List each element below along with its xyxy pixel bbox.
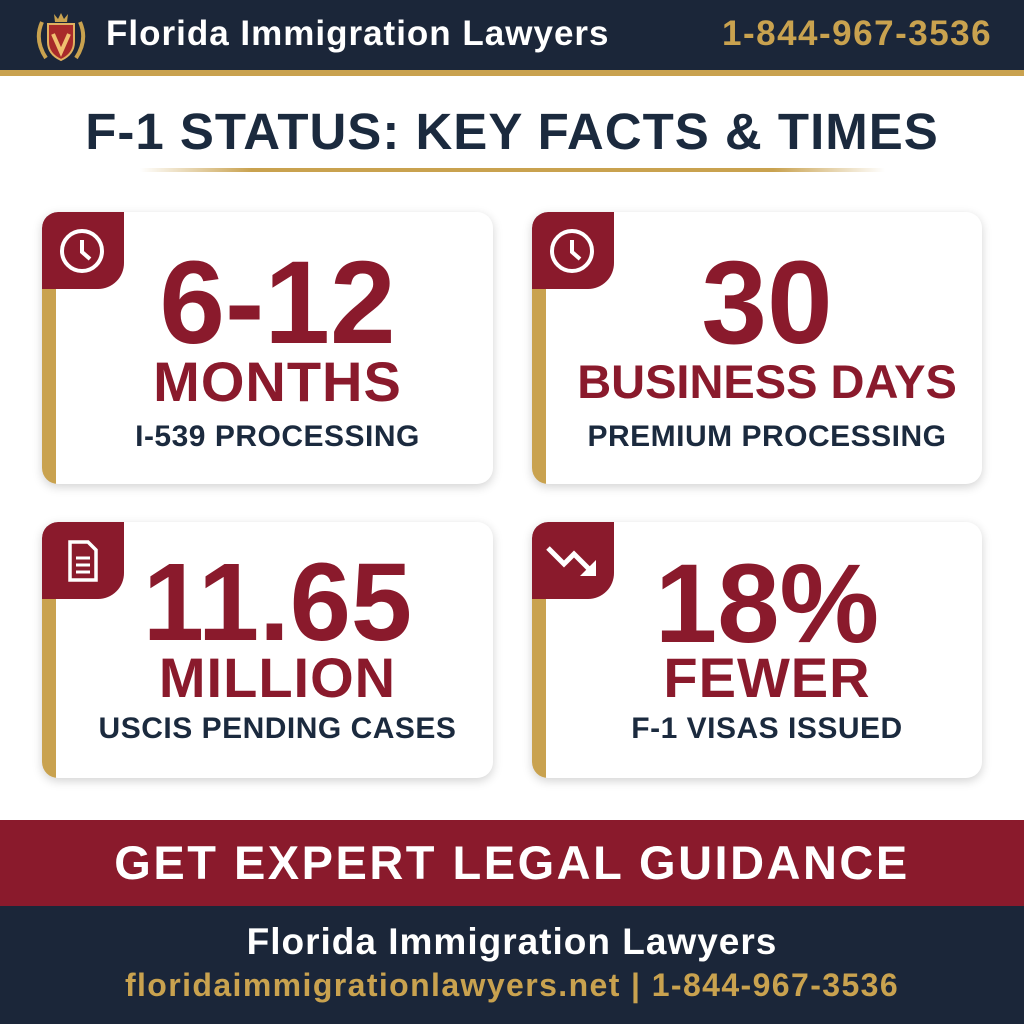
banner: call to action (0, 820, 1024, 906)
title: F-1 STATUS: KEY FACTS & TIMES (85, 103, 939, 160)
card: pending cases: 11.65 (143, 541, 412, 664)
icon: clock (532, 212, 614, 289)
card: pending cases: MILLION (159, 646, 396, 709)
icon: clock (42, 212, 124, 289)
banner: call to action: GET EXPERT LEGAL GUIDANCE (114, 836, 910, 889)
card: pending cases (42, 522, 493, 778)
card: premium processing (532, 212, 982, 484)
card: fewer visas: 18% (655, 541, 879, 666)
header phone: 1-844-967-3536 (722, 14, 992, 53)
footer name: Florida Immigration Lawyers (247, 921, 777, 962)
footer contact: floridaimmigrationlawyers.net | 1-844-967-3536 (125, 967, 899, 1003)
card: fewer visas: FEWER (663, 646, 871, 709)
card: pending cases: USCIS PENDING CASES (99, 712, 456, 745)
icon: logo crest (36, 13, 86, 62)
card: premium processing: 30 (701, 237, 833, 369)
card: fewer visas (532, 522, 982, 778)
card: premium processing: BUSINESS DAYS (577, 355, 957, 408)
header bar (0, 0, 1024, 76)
card: fewer visas: F-1 VISAS ISSUED (631, 712, 903, 745)
header name: Florida Immigration Lawyers (106, 14, 610, 53)
card: premium processing: PREMIUM PROCESSING (587, 420, 947, 453)
icon: document (42, 522, 124, 599)
footer (0, 906, 1024, 1024)
card: processing time: I-539 PROCESSING (135, 420, 420, 453)
icon: downtrend arrow (532, 522, 614, 599)
card: processing time: MONTHS (153, 350, 402, 413)
card: processing time: 6-12 (159, 237, 396, 369)
card: processing time (42, 212, 493, 484)
